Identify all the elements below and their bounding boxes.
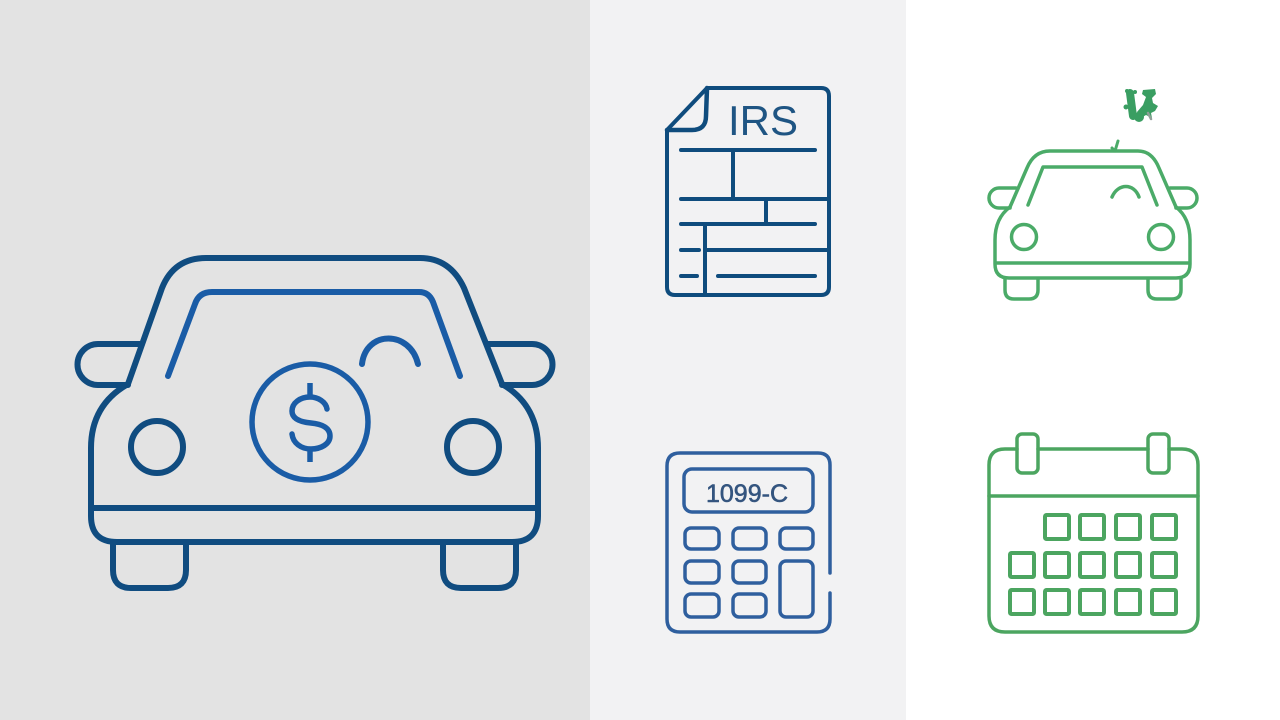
calendar day cells [1010,515,1176,614]
icon: green splotch artifact [1124,89,1158,122]
calendar header line [989,494,1198,498]
icon: large car with dollar coin [77,258,552,588]
form lines [681,150,829,295]
green car windshield and wiper [1028,167,1157,205]
icon: calculator showing 1099-C [667,453,830,632]
windshield and wiper [168,292,460,376]
folded corner [667,88,707,130]
IRS label: IRS [728,97,798,144]
panel: middle light background [590,0,906,720]
panel: left grey background [0,0,590,720]
icon: small green car [989,141,1197,299]
calendar rings [1017,434,1038,473]
icon: IRS tax form document [667,88,829,295]
calculator readout: 1099-C [706,480,788,508]
calculator screen [684,469,813,512]
dollar coin [252,364,368,480]
calculator keys [685,528,813,617]
green car headlights [1012,224,1036,250]
document outline [667,88,829,295]
calendar frame [989,449,1198,632]
icon: green calendar [989,434,1198,632]
green car body [1010,151,1176,207]
panel: right white background [906,0,1280,720]
calculator case [667,453,830,632]
car body outline [77,258,552,588]
roof tick artifact [1112,141,1118,151]
